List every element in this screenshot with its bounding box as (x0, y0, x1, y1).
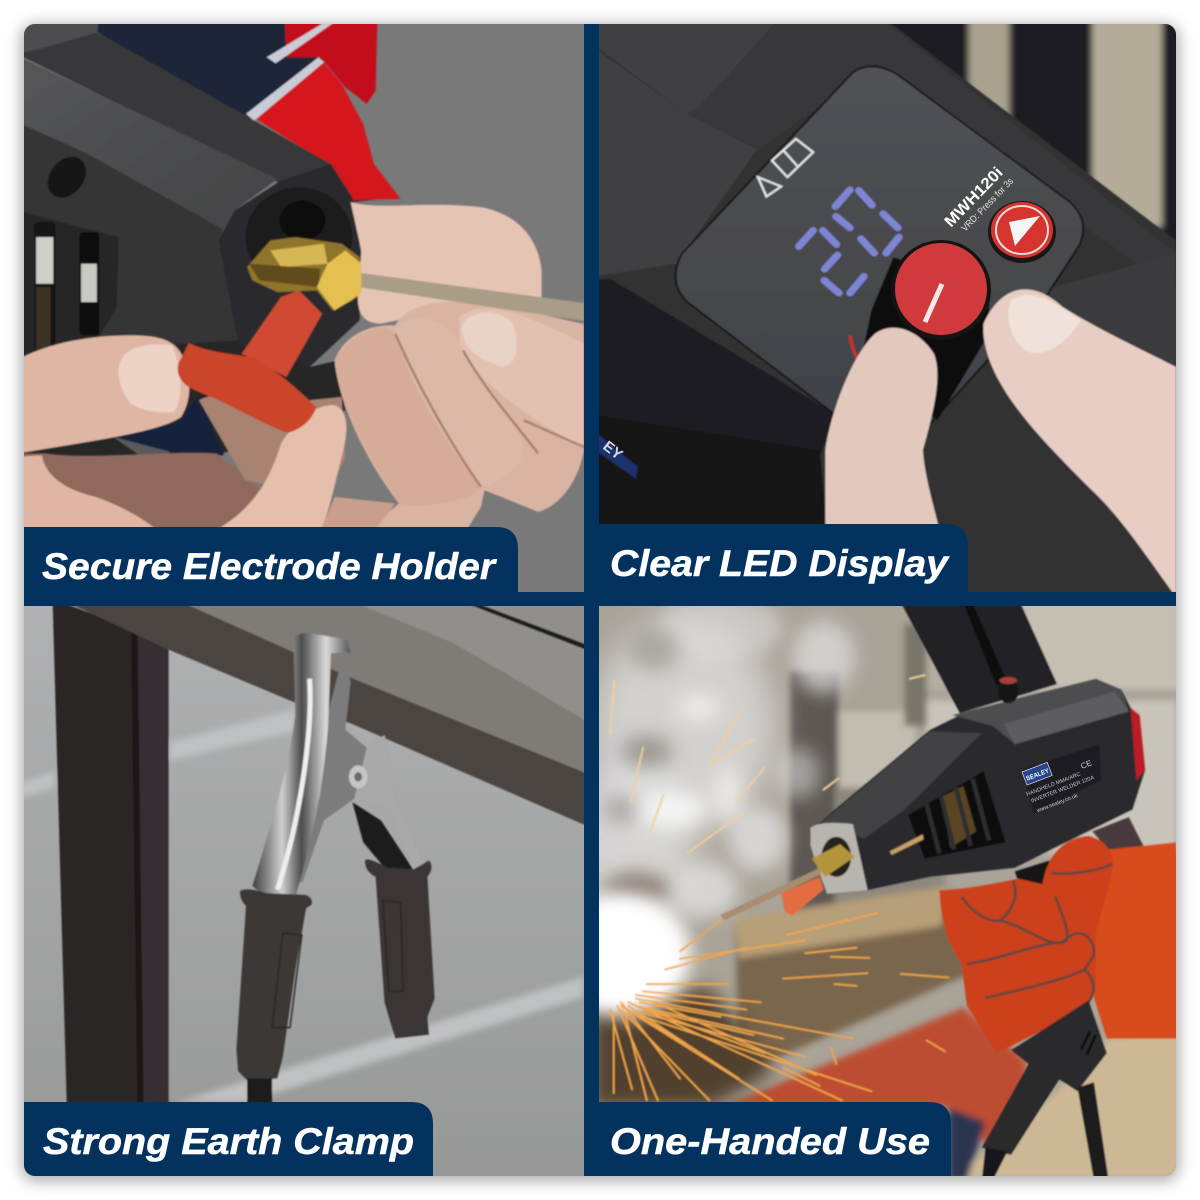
stand arm (899, 599, 1057, 713)
label: secure electrode holder: Secure Electrode Holder (42, 546, 498, 587)
label: one-handed use (599, 1102, 951, 1176)
label: one-handed use: One-Handed Use (610, 1121, 930, 1162)
operator jacket (96, 24, 401, 202)
weld arc glow (551, 893, 691, 1017)
label: clear LED display (599, 524, 968, 592)
panel 3 photo illustration (17, 599, 595, 1108)
handheld welder (811, 677, 1145, 894)
rubber grips (236, 860, 435, 1108)
right hand (335, 202, 584, 530)
product text (1026, 767, 1099, 816)
horizontal gutter (24, 592, 1176, 606)
welding rod (347, 271, 584, 321)
sealey badge (1022, 762, 1052, 785)
fingers on dial (825, 289, 1176, 597)
blurred workshop background (892, 24, 1176, 240)
warning and manual icons (758, 139, 813, 196)
wall mortar lines (17, 710, 584, 1102)
CE marks: CE (1079, 758, 1093, 771)
red start button (988, 201, 1056, 263)
sealey badge: SEALEY (1025, 767, 1051, 783)
dark metal under sparks (592, 988, 776, 1108)
panel: secure electrode holder (17, 17, 584, 592)
panel 1 photo illustration (17, 17, 584, 532)
control display panel (676, 66, 1083, 424)
sparks (610, 913, 949, 1100)
panel: strong earth clamp (17, 599, 595, 1176)
panel: one-handed use (599, 606, 1176, 1176)
left thumb (17, 335, 189, 454)
panel 2 photo illustration (588, 14, 1188, 600)
panel 4 photo illustration (599, 606, 1176, 1176)
brand strip (595, 432, 638, 479)
electrode and holder (720, 834, 924, 920)
label: strong earth clamp (24, 1102, 433, 1176)
blurred workshop background (720, 599, 1180, 1180)
welder top face (588, 14, 1188, 600)
label: secure electrode holder (24, 527, 518, 592)
lower left hand and palm (17, 393, 395, 532)
smoke cloud (570, 595, 855, 919)
welding glove (939, 836, 1188, 1052)
bench rail (60, 599, 595, 830)
bench leg (53, 599, 169, 1108)
label: strong earth clamp: Strong Earth Clamp (43, 1121, 414, 1162)
LED readout 20 (799, 190, 899, 293)
label: clear LED display: Clear LED Display (610, 543, 951, 584)
model label: VRD: Press for 3s (959, 176, 1016, 234)
brass connector (247, 237, 361, 310)
dial base and mark (850, 257, 989, 420)
red dial knob (891, 240, 991, 340)
smoke mottling (603, 628, 743, 908)
product text: INVERTER WELDER 120A (1030, 775, 1095, 805)
brand text on side: EY (600, 438, 626, 463)
product text: www.sealey.co.uk (1035, 793, 1079, 815)
plug grip and cables (982, 1000, 1109, 1180)
product text: HANDHELD MMA/ARC (1026, 772, 1082, 798)
earth clamp (252, 633, 424, 899)
model label: MWH120i (942, 164, 1007, 231)
red locking key (178, 290, 322, 433)
welder body (17, 17, 361, 460)
panel: clear LED display (588, 14, 1188, 600)
